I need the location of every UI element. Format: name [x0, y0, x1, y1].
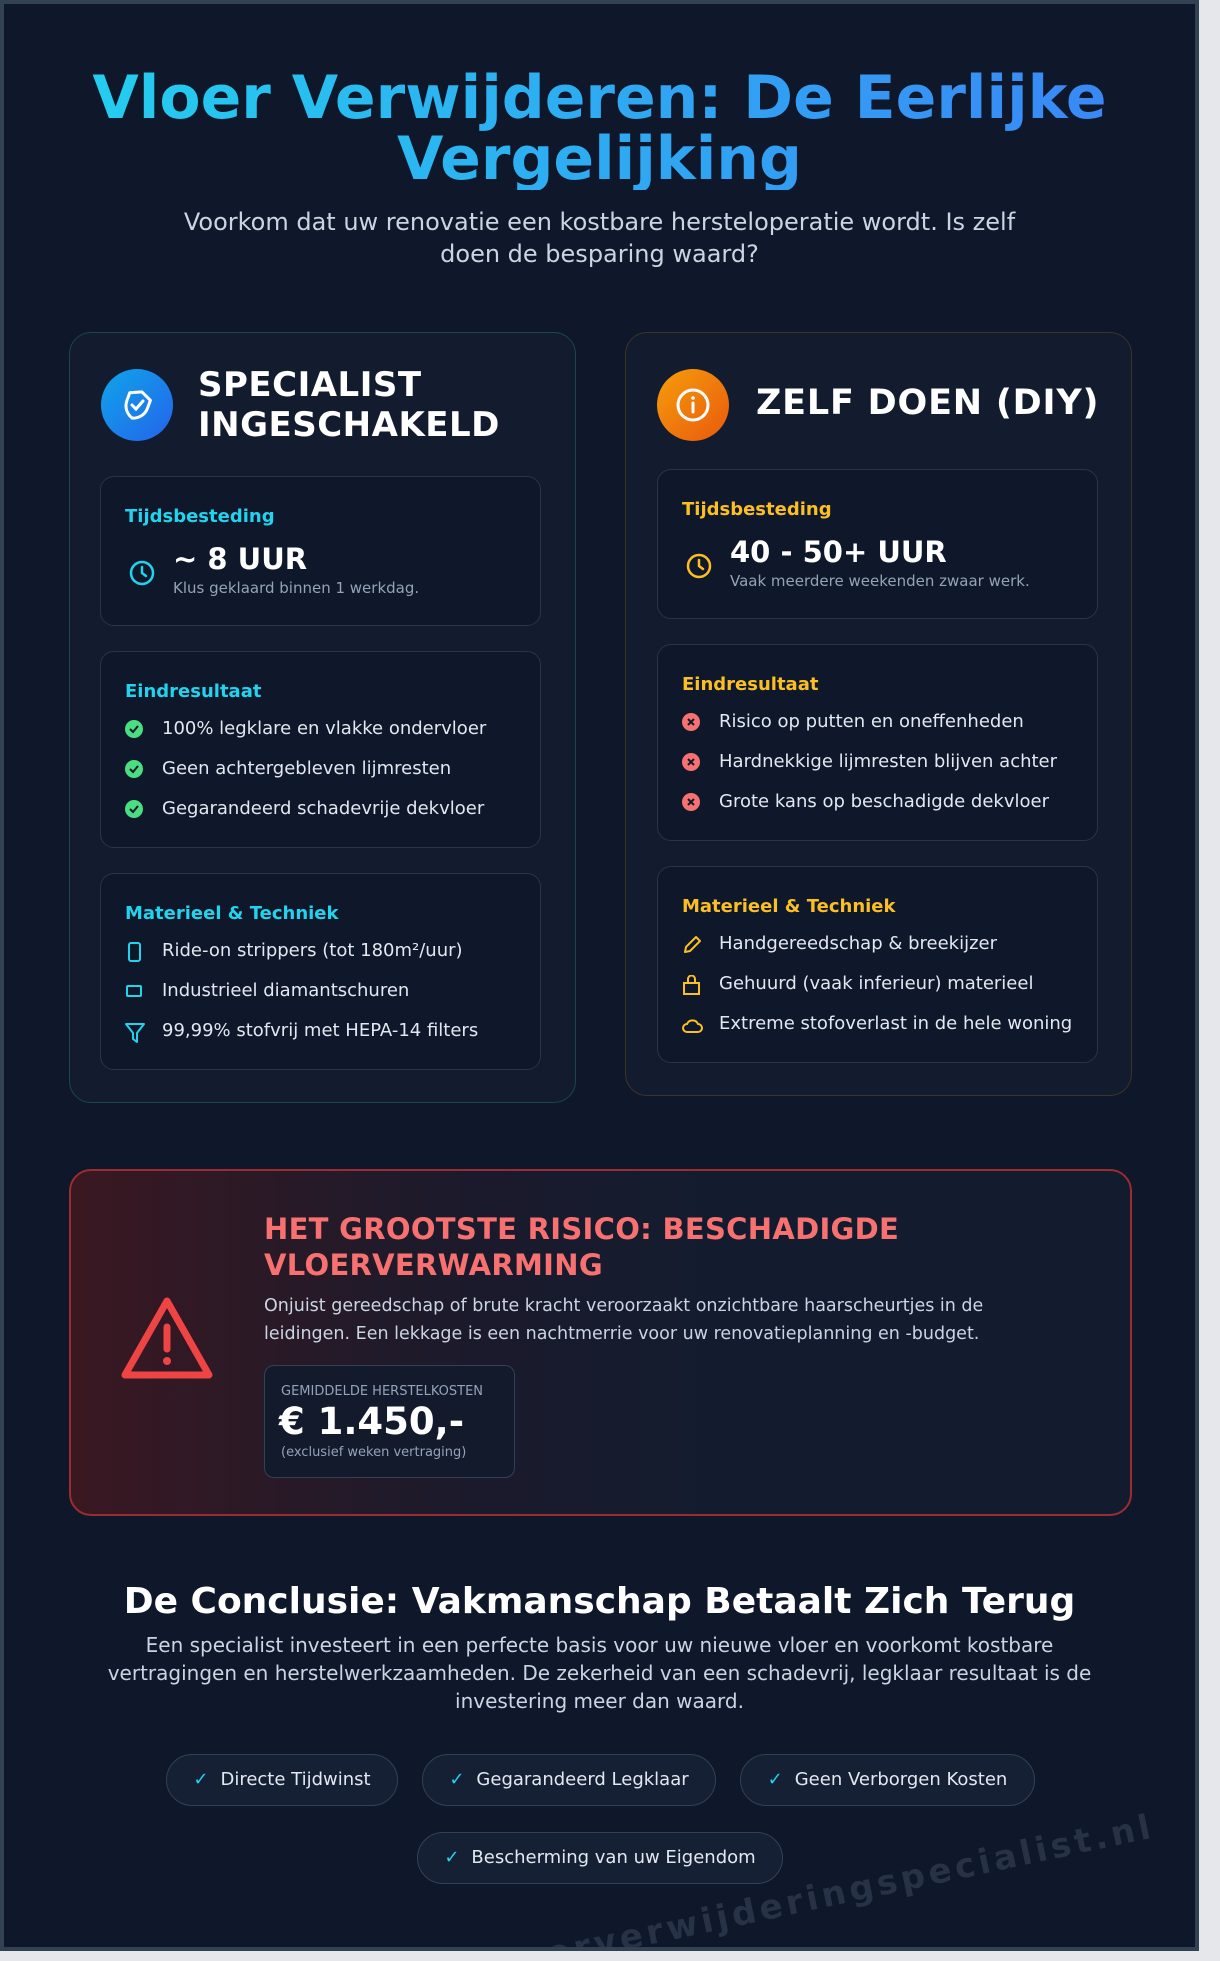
box: materieel: Handgereedschap & breekijzer — [719, 933, 997, 954]
risk heading: VLOERVERWARMING — [264, 1248, 603, 1282]
pill: tijdwinst — [166, 1754, 398, 1806]
box: eindresultaat: Grote kans op beschadigde dekvloer — [719, 791, 1049, 812]
pill: eigendom — [417, 1832, 783, 1884]
box: tijdsbesteding — [657, 469, 1098, 619]
title: Vergelijking — [397, 124, 802, 194]
box: materieel: Materieel & Techniek — [125, 903, 338, 924]
box: tijdsbesteding: ~ 8 UUR — [173, 542, 307, 576]
box: eindresultaat: Eindresultaat — [682, 674, 818, 695]
title — [4, 68, 1195, 190]
cost box: (exclusief weken vertraging) — [281, 1445, 466, 1460]
risk heading: HET GROOTSTE RISICO: BESCHADIGDE — [264, 1212, 899, 1246]
heading: ZELF DOEN (DIY) — [756, 383, 1099, 423]
box: materieel — [657, 866, 1098, 1063]
box: tijdsbesteding: Tijdsbesteding — [682, 499, 832, 520]
cost box: € 1.450,- — [279, 1400, 464, 1443]
conclusion heading: De Conclusie: Vakmanschap Betaalt Zich Terug — [124, 1581, 1075, 1622]
box: materieel: Materieel & Techniek — [682, 896, 895, 917]
box: materieel: Gehuurd (vaak inferieur) materieel — [719, 973, 1033, 994]
conclusion text: Een specialist investeert in een perfecte basis voor uw nieuwe vloer en voorkomt kostbare vertragingen en herstelwerkzaamheden. De zekerheid van een schadevrij, legklaar resultaat is de investering meer dan waard. — [108, 1633, 1091, 1713]
box: eindresultaat — [100, 651, 541, 848]
box: tijdsbesteding: Vaak meerdere weekenden zwaar werk. — [730, 572, 1030, 590]
box: eindresultaat — [657, 644, 1098, 841]
title: Vloer Verwijderen: De Eerlijke — [92, 63, 1107, 133]
heading: INGESCHAKELD — [198, 405, 500, 445]
box: tijdsbesteding — [100, 476, 541, 626]
risk heading — [264, 1212, 899, 1282]
pill: kosten — [740, 1754, 1035, 1806]
panel: specialist — [69, 332, 576, 1103]
box: eindresultaat: 100% legklare en vlakke ondervloer — [162, 718, 486, 739]
cost box — [264, 1365, 515, 1478]
icon: clock — [130, 560, 154, 586]
icon: clock — [686, 554, 712, 578]
box: materieel: 99,99% stofvrij met HEPA-14 filters — [162, 1020, 478, 1041]
pill: eigendom: ✓ Bescherming van uw Eigendom — [444, 1847, 756, 1868]
box: materieel — [100, 873, 541, 1070]
heading: SPECIALIST — [198, 365, 422, 405]
box: materieel: Industrieel diamantschuren — [162, 980, 409, 1001]
box: tijdsbesteding: 40 - 50+ UUR — [730, 535, 947, 569]
box: tijdsbesteding: Klus geklaard binnen 1 werkdag. — [173, 579, 419, 597]
panel: risk callout — [69, 1169, 1132, 1516]
pill: kosten: ✓ Geen Verborgen Kosten — [768, 1769, 1007, 1790]
box: eindresultaat: Geen achtergebleven lijmresten — [162, 758, 451, 779]
pill: legklaar — [422, 1754, 716, 1806]
box: eindresultaat: Eindresultaat — [125, 681, 261, 702]
cost box: GEMIDDELDE HERSTELKOSTEN — [281, 1384, 483, 1399]
box: materieel: Extreme stofoverlast in de hele woning — [719, 1013, 1072, 1034]
box: eindresultaat: Gegarandeerd schadevrije dekvloer — [162, 798, 484, 819]
icon: info — [657, 369, 729, 441]
box: eindresultaat: Risico op putten en oneffenheden — [719, 711, 1024, 732]
subtitle: Voorkom dat uw renovatie een kostbare hersteloperatie wordt. Is zelf doen de besparing waard? — [184, 208, 1015, 268]
box: tijdsbesteding: Tijdsbesteding — [125, 506, 275, 527]
panel: diy — [625, 332, 1132, 1096]
pill: legklaar: ✓ Gegarandeerd Legklaar — [449, 1769, 689, 1790]
risk text: Onjuist gereedschap of brute kracht veroorzaakt onzichtbare haarscheurtjes in de leidingen. Een lekkage is een nachtmerrie voor uw renovatieplanning en -budget. — [264, 1296, 983, 1344]
icon: warning — [122, 1298, 212, 1378]
box: materieel: Ride-on strippers (tot 180m²/uur) — [162, 940, 463, 961]
icon: shield check — [101, 369, 173, 441]
pill: tijdwinst: ✓ Directe Tijdwinst — [193, 1769, 371, 1790]
heading — [198, 365, 500, 445]
box: eindresultaat: Hardnekkige lijmresten blijven achter — [719, 751, 1057, 772]
